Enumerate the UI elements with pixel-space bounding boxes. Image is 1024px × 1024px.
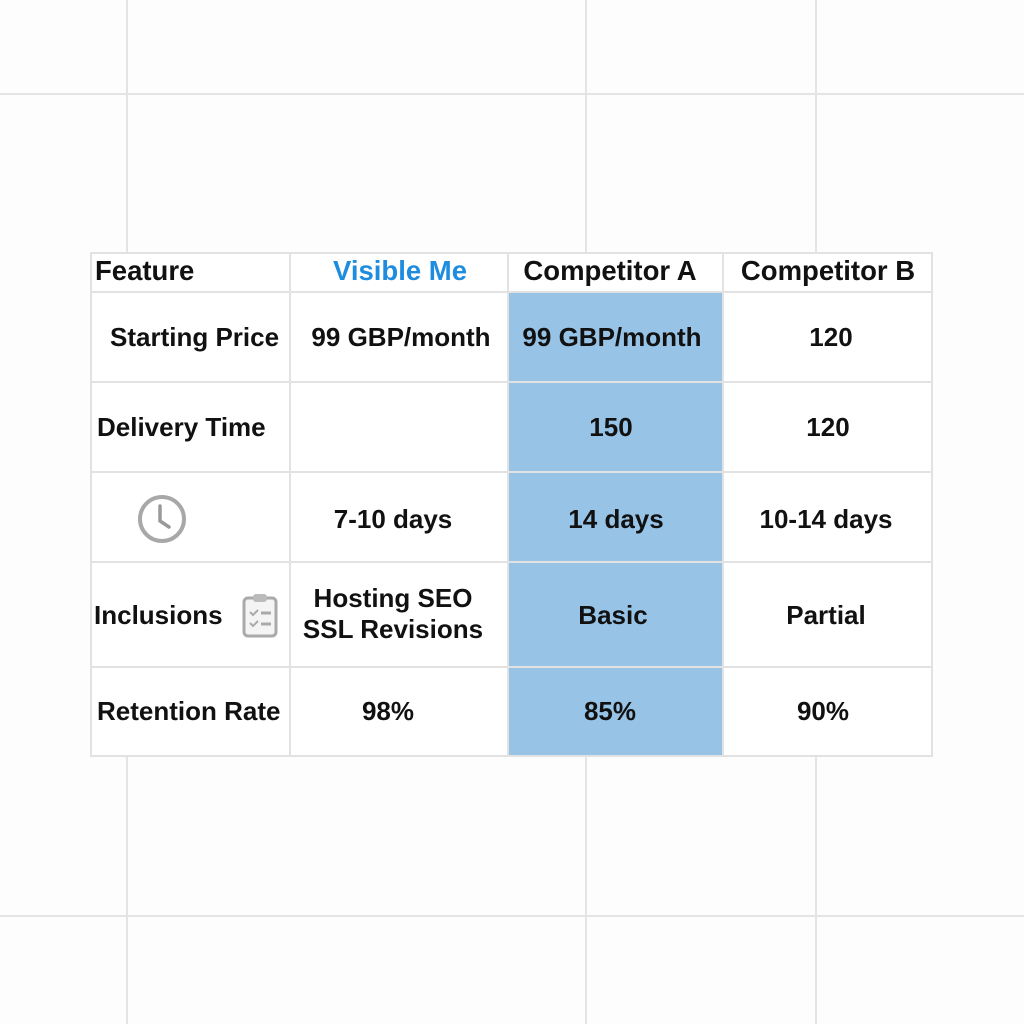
row: days: 7-10 days [334, 504, 452, 534]
header row: Visible Me [333, 255, 467, 286]
row: days [138, 495, 892, 543]
row: inclusions: Inclusions [94, 600, 223, 630]
row: delivery time [97, 412, 850, 442]
header row: Competitor B [741, 255, 915, 286]
row: inclusions: Hosting SEO [314, 583, 472, 613]
row: retention rate [97, 696, 849, 726]
row: retention rate: Retention Rate [97, 696, 280, 726]
row: delivery time: 120 [806, 412, 850, 442]
row: starting price [110, 322, 853, 352]
header row: Competitor A [523, 255, 697, 286]
header row [95, 255, 915, 286]
row: starting price: Starting Price [110, 322, 279, 352]
header row: Feature [95, 255, 194, 286]
icon: clock [138, 495, 186, 543]
highlighted column: Competitor A [508, 292, 723, 757]
row: inclusions: Basic [578, 600, 648, 630]
row: days: 14 days [568, 504, 664, 534]
icon: clipboard [242, 594, 278, 638]
row: retention rate: 90% [797, 696, 849, 726]
row: inclusions: Partial [786, 600, 866, 630]
comparison table [90, 252, 933, 757]
row: delivery time: Delivery Time [97, 412, 266, 442]
row: starting price: 120 [809, 322, 853, 352]
row: retention rate: 98% [362, 696, 414, 726]
row: starting price: 99 GBP/month [311, 322, 491, 352]
row: days: 10-14 days [760, 504, 892, 534]
row: delivery time: 150 [589, 412, 633, 442]
row: inclusions [94, 583, 866, 644]
row: inclusions: SSL Revisions [303, 614, 483, 644]
row: retention rate: 85% [584, 696, 636, 726]
row: starting price: 99 GBP/month [522, 322, 702, 352]
